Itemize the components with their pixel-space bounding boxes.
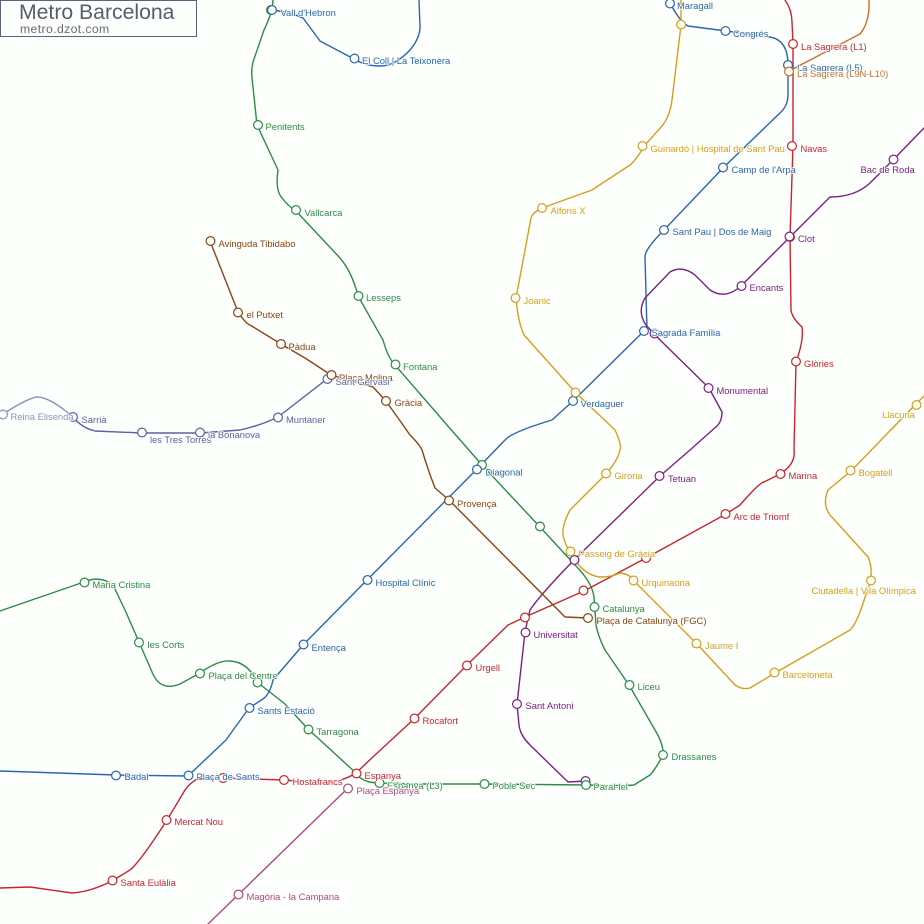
line: FGC brown (210, 241, 588, 618)
labels: L4 yellow (524, 143, 917, 680)
labels: L5 blue: Badal (124, 771, 148, 782)
title: Metro Barcelona (19, 1, 175, 24)
stations: L1 red (108, 40, 800, 885)
labels: L5 blue: Plaça de Sants (196, 771, 260, 782)
labels: L6 slate blue: Sant Gervasi (336, 376, 390, 387)
station: Reina Elisenda (0, 410, 7, 419)
labels: L1 red: La Sagrera (L1) (801, 41, 867, 52)
labels: L5 blue: Sant Pau | Dos de Maig (672, 226, 771, 237)
labels: L1 red: Mercat Nou (174, 816, 223, 827)
labels: L4 yellow: Urquinaona (642, 577, 691, 588)
labels: L3 green: Penitents (266, 121, 305, 132)
labels: L1 red: Navas (800, 143, 827, 154)
labels: L8 magenta: Magòria - la Campana (246, 891, 340, 902)
labels: L3 green (92, 121, 717, 792)
stations: FGC brown (206, 237, 592, 622)
labels: L5 blue: Vall d'Hebron (280, 7, 336, 18)
labels: L3 green: Plaça del Centre (208, 670, 278, 681)
labels: L2 purple: Clot (798, 233, 815, 244)
line: L4 yellow (516, 0, 924, 689)
labels: L3 green: Espanya (L3) (387, 780, 443, 791)
labels: L2 purple: Encants (750, 282, 784, 293)
labels: L1 red: Hostafrancs (292, 776, 343, 787)
labels: FGC brown: Plaça Molina (339, 372, 393, 383)
labels: FGC brown: Pàdua (288, 341, 316, 352)
stations: L4 yellow (511, 20, 921, 677)
labels: L1 red: Rocafort (422, 715, 458, 726)
labels: L4 yellow: Passeig de Gràcia (578, 548, 656, 559)
labels: FGC brown: Provença (457, 498, 497, 509)
station: Paral·lel green (582, 781, 590, 789)
labels: L2 purple: Tetuan (668, 473, 696, 484)
labels: L5 blue: Congrés (733, 28, 769, 39)
labels: L3 green: Maria Cristina (92, 579, 151, 590)
line: L2 purple (517, 128, 924, 782)
labels: L4 yellow: Joanic (524, 295, 551, 306)
labels: L5 blue: Verdaguer (580, 398, 624, 409)
labels: L5 blue: Sants Estació (258, 705, 315, 716)
labels: L4 yellow: Guinardó | Hospital de Sant Pau (650, 143, 785, 154)
subtitle: metro.dzot.com (20, 22, 110, 36)
labels: L5 blue: Maragall (677, 0, 713, 11)
labels: L4 yellow: Bogatell (858, 467, 892, 478)
labels: L1 red: Marina (788, 470, 818, 481)
labels: FGC brown (218, 238, 706, 626)
labels: FGC brown: Gràcia (394, 397, 423, 408)
labels: L2 purple: Monumental (716, 385, 768, 396)
label: Reina Elisenda: Reina Elisenda (10, 411, 74, 422)
labels: FGC brown: Plaça de Catalunya (FGC) (596, 615, 706, 626)
line: L12 pale slate (3, 397, 73, 417)
labels: L1 red: Glòries (804, 358, 834, 369)
labels: L1 red: Espanya (364, 770, 402, 781)
labels: L3 green: Catalunya (602, 603, 646, 614)
labels: L3 green: Poble Sec (492, 780, 536, 791)
stations: L8 magenta (234, 784, 352, 899)
labels: FGC brown: Avinguda Tibidabo (218, 238, 295, 249)
labels: L5 blue: La Sagrera (L5) (797, 62, 863, 73)
labels: L4 yellow: Ciutadella | Vila Olímpica (812, 585, 917, 596)
title box (0, 0, 196, 36)
line: L6 slate blue (73, 379, 327, 433)
labels: L5 blue: Entença (312, 642, 347, 653)
labels: L1 red: Urgell (476, 662, 500, 673)
labels: L5 blue: Camp de l'Arpa (732, 164, 797, 175)
stations: L3 green (80, 6, 667, 788)
labels: L6 slate blue: Sarrià (82, 414, 107, 425)
labels: L4 yellow: Girona (614, 470, 643, 481)
labels: L3 green: Drassanes (672, 751, 717, 762)
labels: L2 purple: Universitat (534, 629, 578, 640)
labels: L1 red: Santa Eulàlia (120, 877, 177, 888)
labels: L3 green: Vallcarca (304, 207, 343, 218)
labels: L4 yellow: Jaume I (705, 640, 738, 651)
line: L5 blue upper section (272, 0, 420, 66)
labels: FGC brown: el Putxet (246, 309, 283, 320)
labels: L6 slate blue (82, 376, 390, 445)
stations: L6 slate blue (69, 375, 332, 437)
labels: L3 green: Fontana (403, 361, 438, 372)
labels: L2 purple (526, 164, 915, 711)
labels: L5 blue (124, 0, 863, 782)
labels: L2 purple: Bac de Roda (860, 164, 915, 175)
labels: L6 slate blue: Muntaner (286, 414, 326, 425)
labels: L5 blue: Sagrada Família (652, 327, 721, 338)
labels: L1 red: Arc de Triomf (734, 511, 790, 522)
labels: L8 magenta (246, 785, 420, 902)
stations: L5 blue (112, 0, 792, 780)
station: La Sagrera orange (785, 67, 793, 76)
labels: L5 blue: Diagonal (486, 466, 523, 478)
line: L3 green (0, 0, 663, 786)
line: L5 blue (0, 3, 788, 776)
labels: L1 red (120, 41, 867, 888)
labels: L4 yellow: Llacuna (882, 409, 916, 420)
stations: L2 purple (513, 155, 898, 785)
labels: L3 green: Paral·lel (594, 781, 628, 792)
labels: L3 green: les Corts (148, 639, 185, 650)
label: La Sagrera orange: La Sagrera (L9N-L10) (797, 68, 888, 79)
line: L8 magenta (208, 788, 348, 924)
labels: L4 yellow: Alfons X (550, 205, 586, 216)
labels: L2 purple: Sant Antoni (526, 700, 573, 711)
labels: L8 magenta: Plaça Espanya (356, 785, 420, 796)
labels: L3 green: Lesseps (366, 292, 401, 303)
labels: L5 blue: Hospital Clínic (376, 577, 436, 588)
line: L9/L10 orange (789, 0, 869, 71)
labels: L6 slate blue: les Tres Torres (150, 434, 212, 445)
labels: L3 green: Liceu (638, 681, 660, 692)
labels: L4 yellow: Barceloneta (782, 669, 833, 680)
labels: L5 blue: El Coll | La Teixonera (362, 55, 451, 66)
labels: L6 slate blue: la Bonanova (208, 429, 261, 440)
labels: L3 green: Tarragona (316, 726, 359, 737)
